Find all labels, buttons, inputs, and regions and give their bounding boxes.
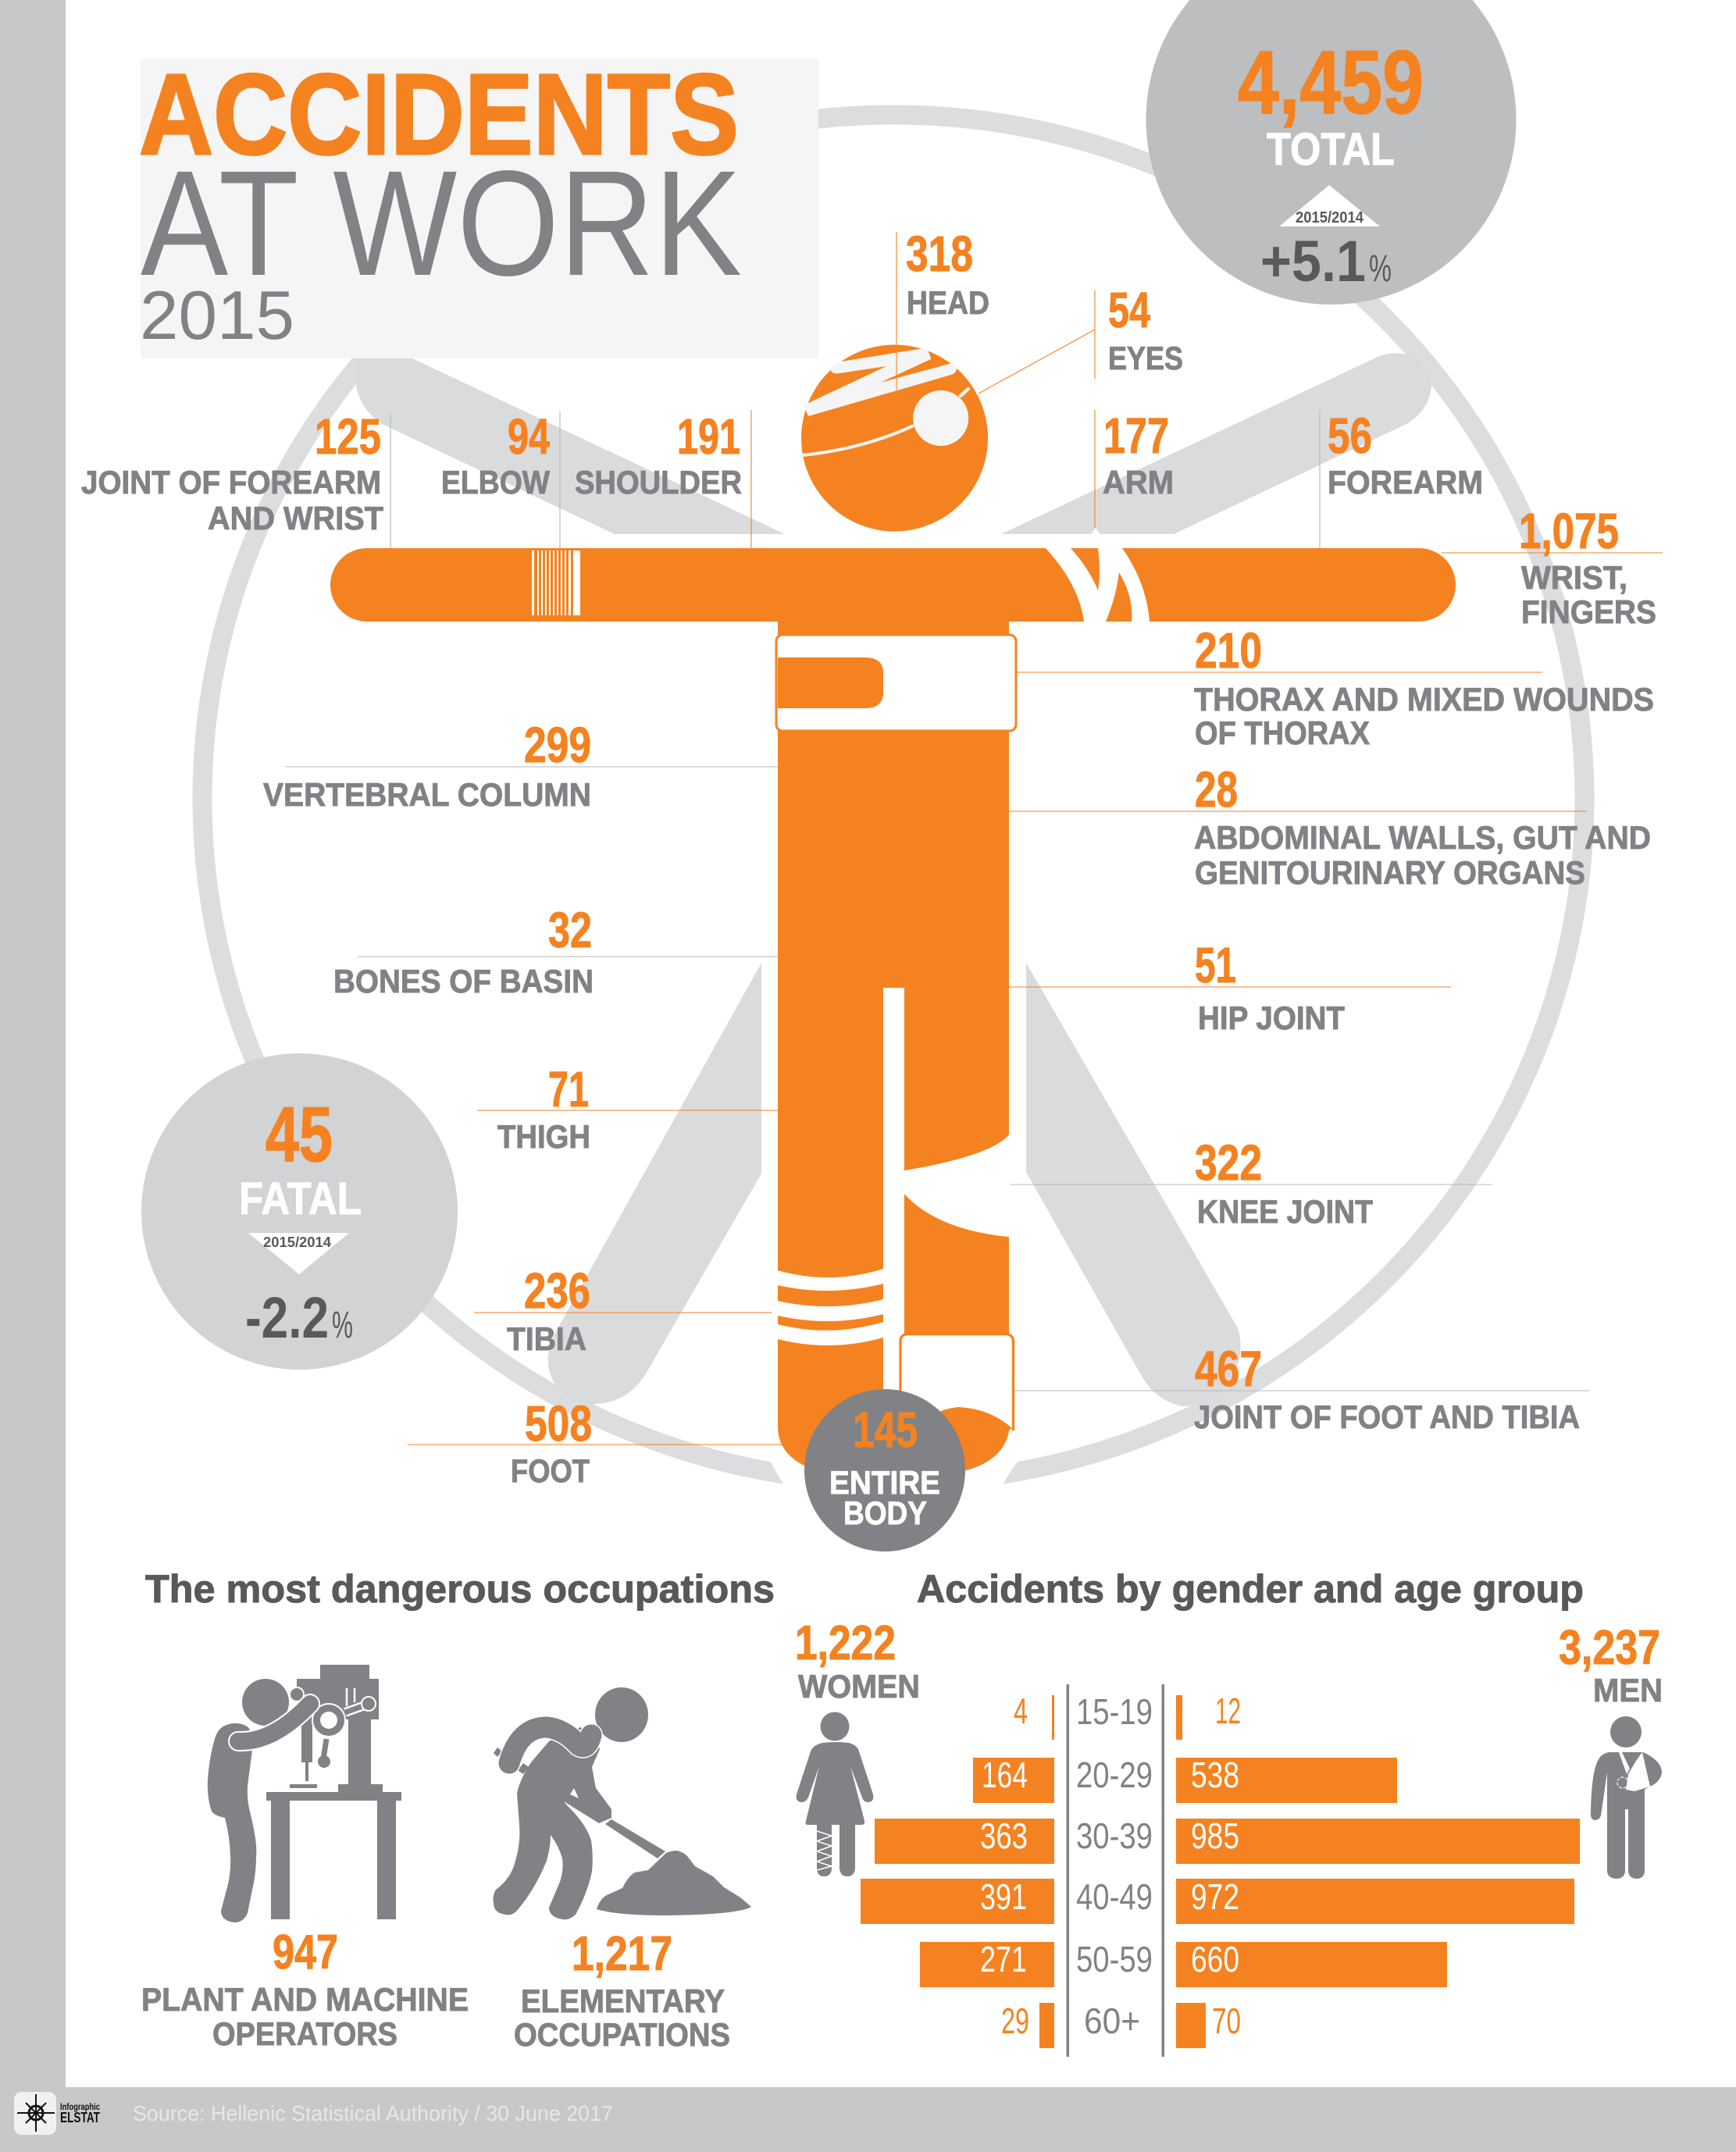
women total — [795, 1616, 920, 1705]
label: shoulder: SHOULDER — [575, 464, 742, 501]
thorax bandage — [776, 635, 1016, 731]
label: vertebral column — [263, 717, 778, 813]
label: shoulder: 191 — [677, 408, 740, 465]
label: abdominal walls: GENITOURINARY ORGANS — [1195, 854, 1585, 891]
label: abdominal walls: ABDOMINAL WALLS, GUT AND — [1194, 819, 1651, 856]
heading: accidents by gender and age: Accidents by gender and age group — [917, 1567, 1584, 1611]
label: vertebral column: 299 — [524, 717, 591, 773]
men total — [1559, 1621, 1663, 1708]
label: head: 318 — [906, 226, 973, 282]
callout: entire body — [804, 1389, 965, 1552]
callout: total accidents: 2015/2014 — [1296, 209, 1364, 226]
stat: elementary occupations: OCCUPATIONS — [514, 2016, 730, 2053]
age row 60+: 70 — [1212, 2001, 1241, 2041]
label: arm: ARM — [1103, 464, 1174, 501]
label: eyes — [979, 282, 1183, 394]
label: knee joint — [1010, 1135, 1492, 1230]
icon: man with arm sling — [1591, 1716, 1662, 1879]
women total: WOMEN — [798, 1668, 920, 1705]
source note: Source: Hellenic Statistical Authority / 30 June 2017 — [133, 2101, 613, 2125]
label: elbow: ELBOW — [441, 464, 550, 501]
label: foot: 508 — [525, 1395, 592, 1452]
label: eyes: 54 — [1108, 282, 1150, 338]
stat: elementary occupations: 1,217 — [572, 1927, 672, 1981]
callout: entire body: 145 — [853, 1402, 918, 1458]
logo: ELSTAT — [14, 2092, 100, 2135]
label: thorax: 210 — [1195, 622, 1262, 679]
age row 30-39: 985 — [1191, 1815, 1239, 1856]
callout: fatal accidents: 2015/2014 — [263, 1235, 331, 1250]
callout: total accidents: TOTAL — [1267, 124, 1395, 175]
age row 50-59: 660 — [1191, 1939, 1239, 1979]
foot cast — [900, 1334, 1014, 1470]
callout: total accidents: +5.1 — [1260, 229, 1366, 294]
age row 40-49: 972 — [1191, 1876, 1239, 1917]
label: arm — [1095, 408, 1174, 528]
label: tibia: TIBIA — [507, 1320, 586, 1357]
callout: entire body: BODY — [843, 1495, 927, 1531]
age row 15-19 — [1014, 1691, 1241, 1740]
label: wrist and fingers: 1,075 — [1519, 503, 1619, 559]
label: head — [897, 226, 989, 390]
age row 15-19: 4 — [1014, 1691, 1028, 1731]
label: tibia — [474, 1263, 772, 1357]
label: knee joint: KNEE JOINT — [1197, 1193, 1373, 1230]
label: elbow — [441, 408, 560, 548]
title: 2015 — [140, 276, 294, 354]
callout: total accidents — [1146, 0, 1517, 305]
label: thigh: THIGH — [497, 1118, 590, 1155]
age row 30-39: 30-39 — [1076, 1815, 1153, 1856]
label: joint of foot and tibia: 467 — [1195, 1341, 1262, 1397]
label: hip joint: HIP JOINT — [1198, 999, 1345, 1036]
age row 50-59: 271 — [980, 1939, 1027, 1979]
label: hip joint — [1009, 937, 1451, 1036]
callout: fatal accidents: FATAL — [239, 1174, 362, 1224]
stat: elementary occupations — [514, 1927, 730, 2053]
label: elbow: 94 — [508, 408, 550, 465]
arms — [330, 528, 1456, 622]
label: arm: 177 — [1103, 408, 1169, 464]
label: eyes: EYES — [1108, 340, 1183, 376]
age row 60+ — [1001, 2001, 1241, 2048]
label: forearm — [1320, 408, 1483, 548]
callout: fatal accidents: % — [332, 1305, 353, 1346]
age row 50-59 — [920, 1939, 1447, 1987]
age row 40-49: 391 — [980, 1876, 1027, 1917]
logo: ELSTAT: Infographic — [60, 2101, 100, 2112]
label: joint of forearm and wrist: AND WRIST — [208, 500, 383, 536]
label: hip joint: 51 — [1195, 937, 1236, 993]
callout: fatal accidents — [141, 1053, 458, 1370]
stat: plant and machine operators: OPERATORS — [212, 2015, 397, 2052]
icon: woman with bandaged leg — [797, 1712, 873, 1876]
stat: plant and machine operators: 947 — [273, 1926, 338, 1979]
age row 40-49: 40-49 — [1076, 1876, 1153, 1917]
age row 20-29: 538 — [1191, 1755, 1239, 1795]
label: joint of foot and tibia — [1014, 1341, 1589, 1435]
label: shoulder — [575, 408, 751, 548]
label: tibia: 236 — [524, 1263, 590, 1319]
label: bones of basin — [333, 902, 778, 999]
label: joint of foot and tibia: JOINT OF FOOT AND TIBIA — [1194, 1398, 1580, 1435]
icon: shovel worker — [493, 1687, 751, 1919]
title: AT WORK — [141, 139, 742, 307]
label: thorax: THORAX AND MIXED WOUNDS — [1194, 681, 1654, 718]
label: forearm: FOREARM — [1328, 464, 1483, 501]
label: head: HEAD — [907, 284, 989, 321]
injured body figure — [330, 345, 1456, 1488]
age row 15-19: 15-19 — [1076, 1691, 1153, 1732]
label: joint of forearm and wrist: 125 — [315, 408, 381, 465]
women total: 1,222 — [795, 1616, 896, 1670]
label: abdominal walls — [1009, 761, 1651, 891]
footer bar — [0, 2087, 1736, 2152]
callout: entire body: ENTIRE — [829, 1464, 940, 1501]
label: vertebral column: VERTEBRAL COLUMN — [263, 776, 591, 813]
stat: plant and machine operators: PLANT AND MACHINE — [141, 1981, 469, 2018]
label: bones of basin: 32 — [548, 902, 592, 958]
stat: plant and machine operators — [141, 1926, 469, 2052]
age row 30-39 — [875, 1815, 1580, 1864]
label: wrist and fingers — [1442, 503, 1663, 630]
background vitruvian ring — [202, 115, 1585, 1495]
left side band — [0, 0, 66, 2152]
label: joint of forearm and wrist: JOINT OF FOREARM — [81, 464, 381, 501]
men total: MEN — [1593, 1672, 1663, 1708]
label: wrist and fingers: FINGERS — [1521, 593, 1656, 630]
label: knee joint: 322 — [1195, 1135, 1262, 1191]
logo: ELSTAT: ELSTAT — [60, 2110, 100, 2125]
age row 50-59: 50-59 — [1076, 1939, 1153, 1979]
label: abdominal walls: 28 — [1195, 761, 1238, 818]
men total: 3,237 — [1559, 1621, 1660, 1675]
age row 40-49 — [861, 1876, 1574, 1924]
age row 20-29: 164 — [982, 1755, 1028, 1795]
title — [139, 51, 818, 358]
background raised and spread limbs — [355, 344, 1431, 1406]
stat: elementary occupations: ELEMENTARY — [521, 1983, 725, 2019]
label: wrist and fingers: WRIST, — [1521, 559, 1627, 596]
label: thorax — [1016, 622, 1654, 751]
label: thigh: 71 — [548, 1061, 589, 1117]
heading: most dangerous occupations: The most dangerous occupations — [145, 1567, 775, 1611]
torso and legs — [778, 617, 1012, 1488]
label: foot — [408, 1395, 782, 1489]
bar chart: accidents by gender and age — [861, 1684, 1580, 2057]
label: bones of basin: BONES OF BASIN — [333, 963, 594, 999]
callout: fatal accidents: -2.2 — [245, 1285, 329, 1350]
label: thorax: OF THORAX — [1195, 714, 1370, 751]
head with bandage — [801, 345, 988, 531]
label: thigh — [477, 1061, 778, 1155]
callout: total accidents: 4,459 — [1238, 33, 1424, 133]
label: foot: FOOT — [511, 1452, 590, 1489]
age row 60+: 60+ — [1084, 2001, 1140, 2041]
age row 20-29: 20-29 — [1076, 1755, 1153, 1795]
icon: machine operator — [208, 1665, 401, 1922]
label: joint of forearm and wrist — [81, 408, 390, 548]
age row 20-29 — [973, 1755, 1397, 1803]
callout: total accidents: % — [1369, 248, 1392, 290]
age row 30-39: 363 — [980, 1815, 1028, 1856]
age row 15-19: 12 — [1215, 1691, 1241, 1731]
age row 60+: 29 — [1001, 2001, 1029, 2041]
label: forearm: 56 — [1328, 408, 1372, 464]
title: ACCIDENTS — [139, 51, 739, 179]
callout: fatal accidents: 45 — [266, 1091, 333, 1178]
